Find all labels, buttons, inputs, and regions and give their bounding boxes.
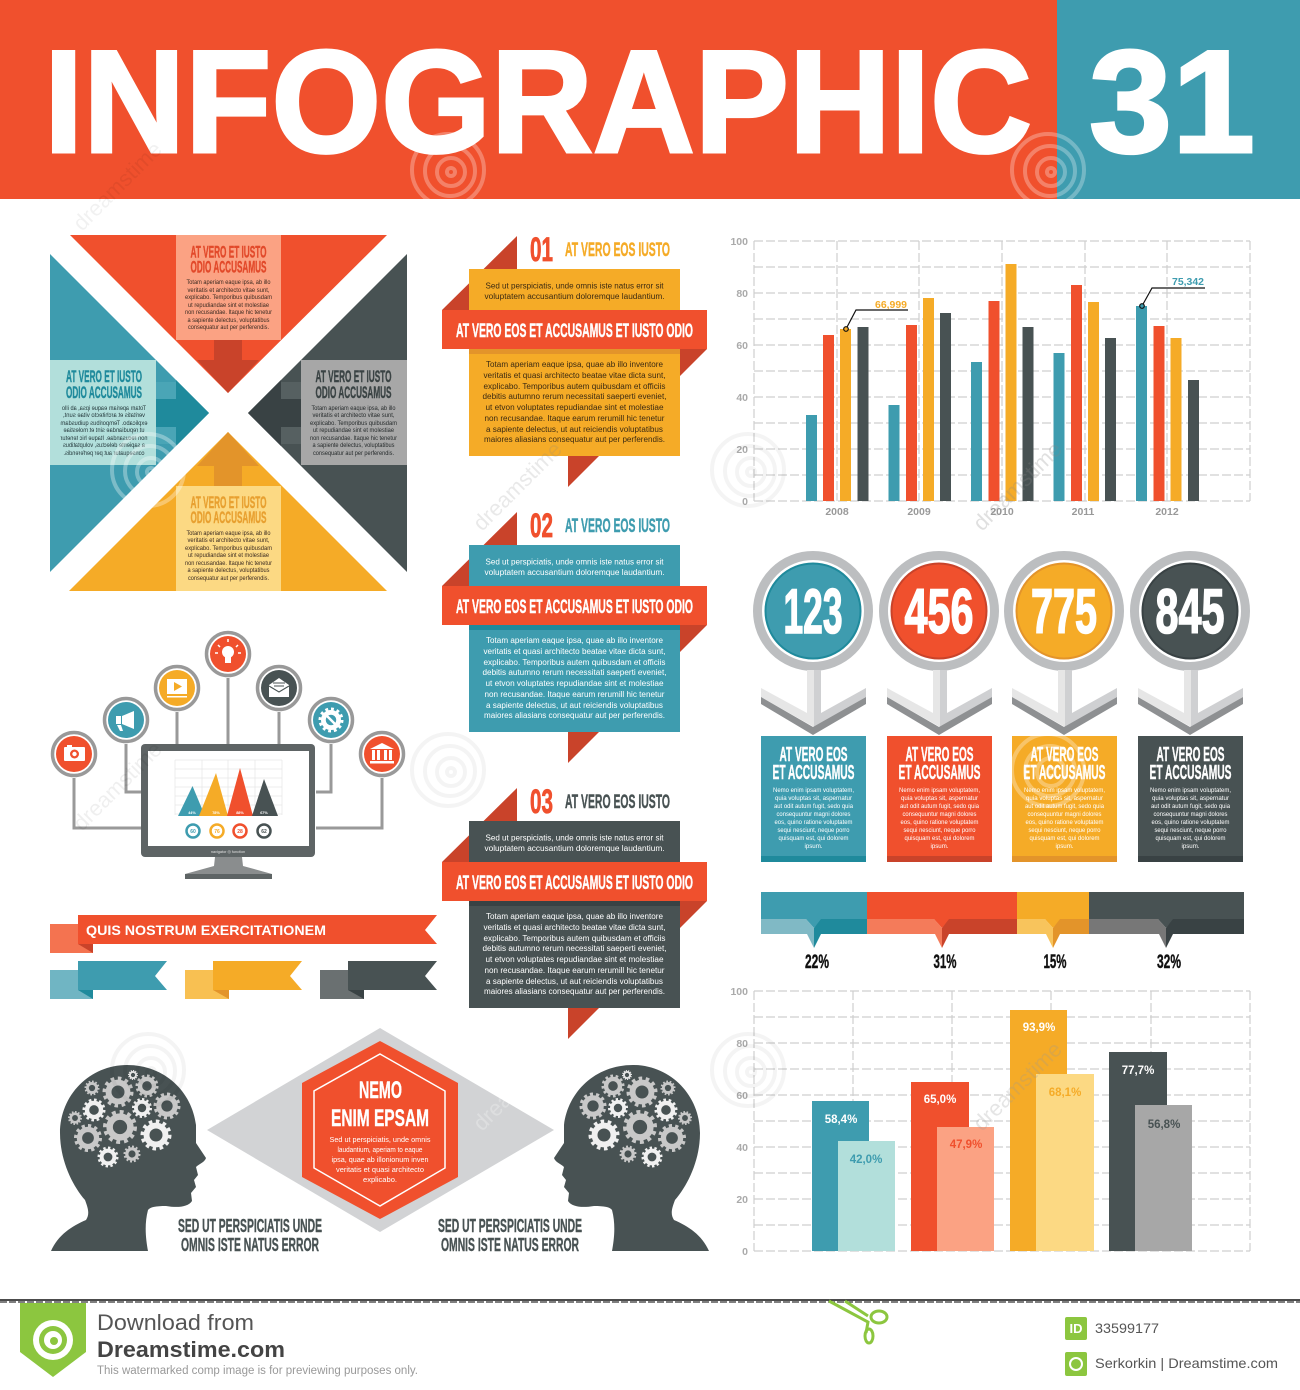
chart: segmented percentage bar: 31% <box>934 952 957 973</box>
hexagon callout: veritatis et quasi architecto <box>336 1165 424 1174</box>
panel: ribbon section 01: maiores aliasians consequatur aut per perferendis. <box>484 435 665 444</box>
panel: ribbon section 01: ut etvon voluptates repudiandae sint et molestiae <box>486 403 664 412</box>
chart: bottom overlapping bar chart: 56,8% <box>1148 1119 1180 1131</box>
watermark spirals: dreamstime <box>468 437 567 536</box>
panel: ribbon section 01: non recusandae. Itaque earum rerumill hic tenetur <box>484 414 665 423</box>
chart: top grouped bar chart: 40 <box>736 392 748 404</box>
hexagon callout: NEMO <box>359 1077 402 1104</box>
panel: ribbon section 03: non recusandae. Itaque earum rerumill hic tenetur <box>484 966 665 975</box>
panel: pin 845: AT VERO EOS <box>1156 744 1224 766</box>
panel: ribbon section 03: AT VERO EOS ET ACCUSAMUS ET IUSTO ODIO <box>456 872 693 894</box>
panel: pin 775: 775 <box>1031 577 1097 647</box>
panel: ribbon section 02: veritatis et quasi architecto beatae vitae dicta sunt, <box>484 647 666 656</box>
icon: left head with gears <box>51 1065 206 1251</box>
icon: author badge <box>1065 1352 1278 1376</box>
chart: bottom overlapping bar chart: 68,1% <box>1049 1087 1081 1099</box>
text block: yellow: non recusandae. Itaque hic tenetur <box>185 560 272 567</box>
panel: ribbon section 02: 02 <box>530 507 553 545</box>
callout: 66,999: 66,999 <box>875 300 907 311</box>
panel: pin 123: sequi nesciunt, neque porro <box>778 827 850 834</box>
icon: monitor: 67% <box>260 811 268 815</box>
footer text: Dreamstime.com <box>97 1337 285 1362</box>
header banner <box>0 0 1300 199</box>
text block: teal: AT VERO ET IUSTO <box>66 368 142 386</box>
chart: top grouped bar chart: 2012 <box>1155 506 1179 518</box>
chart: bottom overlapping bar chart <box>730 986 1250 1258</box>
panel: thinking heads with hexagon <box>51 1028 709 1255</box>
icon: monitor: 76 <box>214 829 220 835</box>
callout: 75,342: 75,342 <box>1172 277 1204 288</box>
panel: ribbon section 03 <box>442 783 707 1039</box>
panel: x-shaped four triangle diagram <box>50 235 407 591</box>
panel: pin 775: Nemo enim ipsam voluptatem, <box>1024 787 1105 794</box>
icon: right head with gears <box>554 1065 709 1251</box>
icon: light bulb <box>206 632 250 676</box>
panel: pin 845: Nemo enim ipsam voluptatem, <box>1150 787 1231 794</box>
panel: pin 845: sequi nesciunt, neque porro <box>1154 827 1227 834</box>
panel: pin 123: ET ACCUSAMUS <box>772 762 854 784</box>
panel: pin 775: quisquam est, qui dolorem <box>1030 835 1100 842</box>
icon: monitor: 62 <box>261 829 267 835</box>
panel: ribbon section 02 <box>442 507 707 763</box>
header banner: 31 <box>1089 20 1255 183</box>
ribbon: dark <box>320 961 437 999</box>
chart: top grouped bar chart: 2008 <box>825 506 849 518</box>
chart: bottom overlapping bar chart: 77,7% <box>1122 1065 1154 1077</box>
chart: segmented percentage bar <box>761 892 1244 973</box>
text block: yellow: explicabo. Temporibus quibusdam <box>185 545 272 552</box>
watermark spirals: dreamstime <box>68 137 167 236</box>
panel: pin 775: sequi nesciunt, neque porro <box>1028 827 1101 834</box>
panel: ribbon section 02: AT VERO EOS IUSTO <box>565 515 670 537</box>
chart: top grouped bar chart: 100 <box>730 236 748 248</box>
panel: ribbon section 01: voluptatem accusantium doloremque laudantium. <box>484 292 664 301</box>
panel: pin 123: eos, quino ratione voluptatem <box>774 819 852 826</box>
callout: 66,999 <box>844 300 908 331</box>
chart: bottom overlapping bar chart: 0 <box>742 1246 748 1258</box>
caption: right head: OMNIS ISTE NATUS ERROR <box>441 1235 579 1255</box>
panel: ribbon section 03: ut etvon voluptates repudiandae sint et molestiae <box>486 955 664 964</box>
panel: ribbon section 01 <box>442 231 707 487</box>
chart: bottom overlapping bar chart: 65,0% <box>924 1094 956 1106</box>
hexagon callout: ipsa, quae ab illonionum inven <box>332 1155 428 1164</box>
panel: pin 775: consequuntur magni dolores <box>1028 811 1102 818</box>
text block: grey: AT VERO ET IUSTO <box>316 368 392 386</box>
chart: top grouped bar chart: 80 <box>736 288 748 300</box>
panel: pin 123: quia voluptas sit, aspernatur <box>775 795 852 802</box>
icon: monitor: 44% <box>188 811 196 815</box>
caption: left head: OMNIS ISTE NATUS ERROR <box>181 1235 319 1255</box>
footer text: This watermarked comp image is for previewing purposes only. <box>97 1365 418 1377</box>
icon: monitor <box>141 744 315 879</box>
panel: pin 845 <box>1134 556 1246 862</box>
panel: ribbon section 02: voluptatem accusantium doloremque laudantium. <box>484 568 664 577</box>
panel: ribbon section 01: explicabo. Temporibus autem quibusdam et officiis <box>484 382 666 391</box>
text block: grey: explicabo. Temporibus quibusdam <box>310 420 397 427</box>
ribbon: quis nostrum exercitationem <box>50 915 437 953</box>
text block: red: non recusandae. Itaque hic tenetur <box>185 309 272 316</box>
text block: teal <box>50 360 156 465</box>
panel: ribbon section 01: debitis autumno rerum necessitati saeperti eveniet, <box>482 392 666 401</box>
panel: ribbon section 01: Totam aperiam eaque ipsa, quae ab illo inventore <box>486 360 664 369</box>
icon: camera <box>52 732 96 776</box>
text block: teal: a sapiente delectus, voluptatibus <box>63 442 145 449</box>
panel: pin 456: quia voluptas sit, aspernatur <box>901 795 978 802</box>
text block: red: ODIO ACCUSAMUS <box>190 258 266 276</box>
caption: left head: SED UT PERSPICIATIS UNDE <box>178 1216 322 1236</box>
text block: yellow: consequatur aut per perferendis. <box>188 575 269 582</box>
text block: red: veritatis et architecto vitae sunt, <box>188 287 270 294</box>
text block: yellow: ODIO ACCUSAMUS <box>190 509 266 527</box>
text block: red: AT VERO ET IUSTO <box>190 244 267 262</box>
panel: pin 456: consequuntur magni dolores <box>902 811 976 818</box>
icon: id badge: 33599177 <box>1095 1320 1159 1336</box>
panel: ribbon section 02: non recusandae. Itaque earum rerumill hic tenetur <box>484 690 665 699</box>
icon: scissors <box>829 1301 887 1343</box>
icon: video player <box>156 666 198 710</box>
panel: pin 845: consequuntur magni dolores <box>1154 811 1228 818</box>
text block: teal: Totam aperiam eaque ipsa, ab illo <box>62 405 146 412</box>
watermark spirals <box>68 134 1084 1136</box>
chart: bottom overlapping bar chart: 80 <box>736 1038 748 1050</box>
panel: ribbon section 02: Sed ut perspiciatis, unde omnis iste natus error sit <box>486 558 664 566</box>
footer text <box>97 1310 418 1377</box>
text block: teal: consequatur aut per perferendis. <box>63 450 144 457</box>
ribbon: teal <box>50 961 167 999</box>
panel: ribbon section 03: Sed ut perspiciatis, unde omnis iste natus error sit <box>486 834 664 842</box>
panel: ribbon section 01: veritatis et quasi architecto beatae vitae dicta sunt, <box>484 371 666 380</box>
watermark spirals: dreamstime <box>968 1037 1067 1136</box>
chart: bottom overlapping bar chart: 60 <box>736 1090 748 1102</box>
hexagon callout: laudantium, aperiam to eaque <box>338 1145 422 1154</box>
panel: pin 456: 456 <box>904 577 974 647</box>
icon: id badge <box>1065 1317 1159 1340</box>
panel: ribbon section 01: Sed ut perspiciatis, unde omnis iste natus error sit <box>486 282 664 290</box>
panel: pin 456: eos, quino ratione voluptatem <box>900 819 978 826</box>
panel: ribbon section 03: maiores aliasians consequatur aut per perferendis. <box>484 987 665 996</box>
text block: yellow: AT VERO ET IUSTO <box>190 494 267 512</box>
panel: pin 775 <box>1008 556 1120 862</box>
caption: right head: SED UT PERSPICIATIS UNDE <box>438 1216 582 1236</box>
icon: author badge: Serkorkin | Dreamstime.com <box>1095 1355 1278 1371</box>
panel: pin 775: ipsum. <box>1056 843 1074 850</box>
arrow: grey left <box>248 380 301 446</box>
chart: bottom overlapping bar chart: 100 <box>730 986 748 998</box>
chart: top grouped bar chart: 2011 <box>1072 506 1095 518</box>
chart: segmented percentage bar: 15% <box>1044 952 1067 973</box>
text block: yellow: ut repudiandae sint et molestiae <box>188 552 269 559</box>
panel: pin 845: eos, quino ratione voluptatem <box>1152 819 1230 826</box>
chart: top grouped bar chart: 20 <box>736 444 748 456</box>
chart: segmented percentage bar: 32% <box>1157 952 1181 973</box>
panel: pin 775: ET ACCUSAMUS <box>1024 762 1106 784</box>
panel: pin 845: 845 <box>1156 577 1224 647</box>
panel: ribbon section 01: a sapiente delectus, ut aut reiciendis voluptatibus <box>486 425 663 434</box>
panel: ribbon section 03: Totam aperiam eaque ipsa, quae ab illo inventore <box>486 912 664 921</box>
panel: ribbon section 01: AT VERO EOS IUSTO <box>565 239 670 261</box>
hexagon callout: ENIM EPSAM <box>331 1105 429 1132</box>
hexagon callout: Sed ut perspiciatis, unde omnis <box>330 1135 431 1144</box>
panel: pin 123: consequuntur magni dolores <box>776 811 850 818</box>
panel: pin 123: 123 <box>784 577 842 647</box>
arrow: red down <box>197 340 259 393</box>
text block: teal: ut repudiandae sint et molestiae <box>63 427 144 434</box>
text block: red: explicabo. Temporibus quibusdam <box>185 294 272 301</box>
text block: red: a sapiente delectus, voluptatibus <box>188 317 270 324</box>
footer text: Download from <box>97 1310 254 1335</box>
text block: yellow: Totam aperiam eaque ipsa, ab illo <box>186 530 271 537</box>
panel: ribbon section 03: debitis autumno rerum necessitati saeperti eveniet, <box>482 944 666 953</box>
icon: id badge: ID <box>1070 1321 1082 1336</box>
panel: ribbon section 02: ut etvon voluptates repudiandae sint et molestiae <box>486 679 664 688</box>
panel: pin 775: quia voluptas sit, aspernatur <box>1026 795 1103 802</box>
watermark spirals: dreamstime <box>468 1037 567 1136</box>
text block: grey: consequatur aut per perferendis. <box>313 450 394 457</box>
icon: monitor: navigator ◎ function <box>211 850 245 854</box>
panel: monitor with connected icons <box>52 632 404 879</box>
panel: pin 845: ipsum. <box>1182 843 1200 850</box>
panel: ribbon section 01: 01 <box>530 231 553 269</box>
text block: grey <box>301 360 407 465</box>
panel: ribbon section 02: maiores aliasians consequatur aut per perferendis. <box>484 711 665 720</box>
icon: bank building <box>360 732 404 776</box>
panel: pin 456: quisquam est, qui dolorem <box>904 835 974 842</box>
panel: ribbon section 02: debitis autumno rerum necessitati saeperti eveniet, <box>482 668 666 677</box>
panel: ribbon section 01: AT VERO EOS ET ACCUSAMUS ET IUSTO ODIO <box>456 320 693 342</box>
icon: monitor: 78% <box>212 811 220 815</box>
ribbon: quis nostrum exercitationem: QUIS NOSTRUM EXERCITATIONEM <box>86 922 326 938</box>
text block: red: ut repudiandae sint et molestiae <box>188 302 269 309</box>
text block: grey: Totam aperiam eaque ipsa, ab illo <box>312 405 396 412</box>
text block: teal: explicabo. Temporibus quibusdam <box>60 420 148 427</box>
panel: pin 123: aut odit autum fugit, sedo quia <box>774 803 853 810</box>
chart: bottom overlapping bar chart: 58,4% <box>825 1114 857 1126</box>
icon: gear and wrench <box>310 698 352 742</box>
text block: yellow: veritatis et architecto vitae sunt, <box>188 537 270 544</box>
chart: top grouped bar chart: 60 <box>736 340 748 352</box>
icon: green badge <box>20 1303 86 1377</box>
panel: pin 845: quisquam est, qui dolorem <box>1156 835 1226 842</box>
arrow: yellow up <box>197 432 259 486</box>
panel: ribbon section 03: 03 <box>530 783 553 821</box>
panel: ribbon section 03: AT VERO EOS IUSTO <box>565 791 670 813</box>
panel: pin 123: quisquam est, qui dolorem <box>778 835 848 842</box>
icon: monitor: 28 <box>237 829 243 835</box>
panel: ribbon section 02: Totam aperiam eaque ipsa, quae ab illo inventore <box>486 636 664 645</box>
watermark spirals: dreamstime <box>68 737 167 836</box>
panel: ribbon section 02: a sapiente delectus, ut aut reiciendis voluptatibus <box>486 701 663 710</box>
panel: pin 456 <box>884 556 994 862</box>
panel: pin 456: Nemo enim ipsam voluptatem, <box>899 787 980 794</box>
chart: top grouped bar chart: 2010 <box>990 506 1014 518</box>
panel: pin 775: AT VERO EOS <box>1030 744 1098 766</box>
chart: top grouped bar chart: 0 <box>742 496 748 508</box>
text block: red <box>176 235 281 340</box>
text block: teal: ODIO ACCUSAMUS <box>66 384 142 402</box>
footer <box>0 1300 1300 1377</box>
panel: pin 456: ET ACCUSAMUS <box>898 762 980 784</box>
icon: megaphone <box>104 698 148 742</box>
icon: envelope <box>258 666 300 710</box>
chart: top grouped bar chart: 2009 <box>907 506 931 518</box>
text block: grey: veritatis et architecto vitae sunt, <box>312 412 395 419</box>
chart: bottom overlapping bar chart: 42,0% <box>850 1154 882 1166</box>
panel: ribbon section 02: AT VERO EOS ET ACCUSAMUS ET IUSTO ODIO <box>456 596 693 618</box>
chart: segmented percentage bar: 22% <box>805 952 829 973</box>
text block: teal: veritatis et architecto vitae sunt, <box>63 412 145 419</box>
header banner: INFOGRAPHIC <box>44 20 1032 183</box>
arrow: teal right <box>156 380 209 446</box>
panel: ribbon section 02: explicabo. Temporibus autem quibusdam et officiis <box>484 658 666 667</box>
panel: ribbon section 03: a sapiente delectus, ut aut reiciendis voluptatibus <box>486 977 663 986</box>
chart: bottom overlapping bar chart: 93,9% <box>1023 1022 1055 1034</box>
panel: pin 456: AT VERO EOS <box>906 744 974 766</box>
text block: grey: non recusandae. Itaque hic tenetur <box>310 435 397 442</box>
text block: red: consequatur aut per perferendis. <box>188 324 269 331</box>
panel: pin 123: ipsum. <box>804 843 823 850</box>
caption: right head <box>438 1216 582 1255</box>
panel: ribbon section 03: explicabo. Temporibus autem quibusdam et officiis <box>484 934 666 943</box>
hexagon callout: explicabo. <box>363 1175 397 1184</box>
chart: top grouped bar chart <box>730 236 1250 518</box>
panel: pin 845: quia voluptas sit, aspernatur <box>1152 795 1229 802</box>
icon: monitor: 60 <box>190 829 196 835</box>
text block: yellow: a sapiente delectus, voluptatibus <box>188 567 270 574</box>
text block: grey: ODIO ACCUSAMUS <box>316 384 392 402</box>
icon: monitor: 88% <box>236 811 244 815</box>
chart: bottom overlapping bar chart: 20 <box>736 1194 748 1206</box>
panel: pin 123 <box>758 556 868 862</box>
text block: grey: ut repudiandae sint et molestiae <box>313 427 394 434</box>
panel: pin 123: Nemo enim ipsam voluptatem, <box>773 787 854 794</box>
panel: pin 123: AT VERO EOS <box>780 744 848 766</box>
panel: pin 775: aut odit autum fugit, sedo quia <box>1025 803 1104 810</box>
hexagon callout <box>302 1041 458 1219</box>
panel: pin 845: aut odit autum fugit, sedo quia <box>1151 803 1230 810</box>
panel: ribbon section 03: veritatis et quasi architecto beatae vitae dicta sunt, <box>484 923 666 932</box>
text block: teal: non recusandae. Itaque hic tenetur <box>60 435 148 442</box>
panel: pin 456: aut odit autum fugit, sedo quia <box>900 803 979 810</box>
watermark spirals: dreamstime <box>968 437 1067 536</box>
diamond background <box>207 1028 554 1232</box>
callout: 75,342 <box>1140 277 1205 308</box>
caption: left head <box>178 1216 322 1255</box>
panel: pin 456: ipsum. <box>930 843 949 850</box>
text block: red: Totam aperiam eaque ipsa, ab illo <box>186 279 271 286</box>
panel: pin 456: sequi nesciunt, neque porro <box>904 827 976 834</box>
text block: yellow <box>176 486 281 591</box>
chart: bottom overlapping bar chart: 47,9% <box>950 1139 982 1151</box>
ribbon: yellow <box>185 961 302 999</box>
text block: grey: a sapiente delectus, voluptatibus <box>312 442 394 449</box>
panel: pin 775: eos, quino ratione voluptatem <box>1026 819 1104 826</box>
panel: ribbon section 03: voluptatem accusantium doloremque laudantium. <box>484 844 664 853</box>
chart: bottom overlapping bar chart: 40 <box>736 1142 748 1154</box>
